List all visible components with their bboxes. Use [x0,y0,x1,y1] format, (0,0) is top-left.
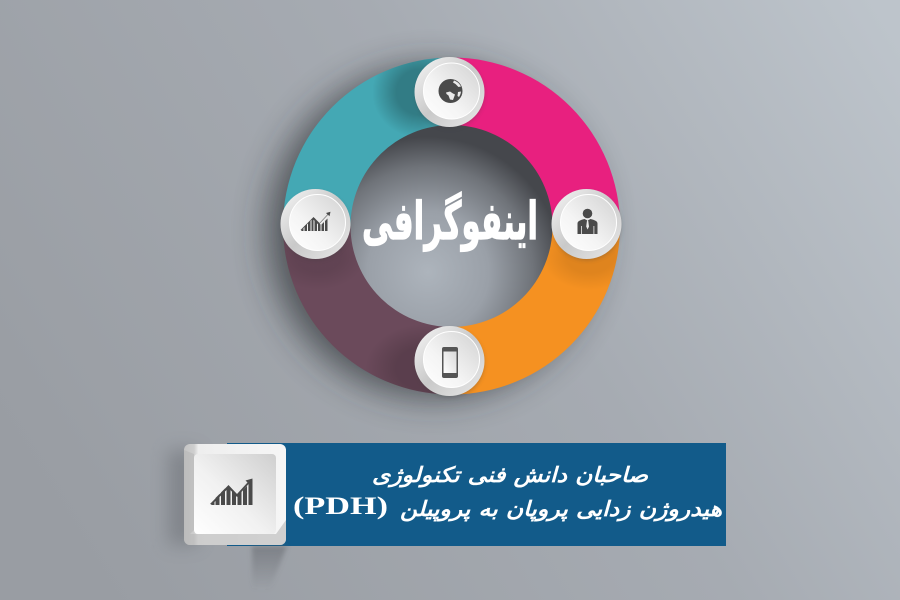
button: businessman [552,189,622,260]
centre title: اینفوگرافی [362,191,538,252]
button: growth chart [280,189,350,260]
segment: orange [452,226,620,394]
key face [194,454,276,534]
button: globe [414,57,484,128]
segment: plum [283,226,452,394]
key cast shadow [252,546,287,590]
ring drop shadow [268,66,600,398]
banner text line 1: صاحبان دانش فنی تکنولوژی [372,463,649,488]
banner background [227,443,726,546]
segment shading under buttons [291,58,619,394]
segment: pink [452,58,620,226]
infographic ring diagram [268,46,638,412]
segment: teal [283,58,452,226]
key outer [184,444,286,545]
icon: growth chart large [210,478,252,505]
button: smartphone [414,326,484,397]
icon: growth chart [300,212,330,231]
banner text line 2: هیدروژن زدایی پروپان به پروپیلن [400,497,722,522]
banner [168,443,726,590]
key button [184,444,287,590]
icon: businessman [578,209,598,234]
icon: smartphone [442,347,458,378]
icon: globe [438,79,462,103]
banner text PDH: (PDH) [293,493,388,520]
key left shadow [168,450,198,545]
centre hole [348,122,556,330]
